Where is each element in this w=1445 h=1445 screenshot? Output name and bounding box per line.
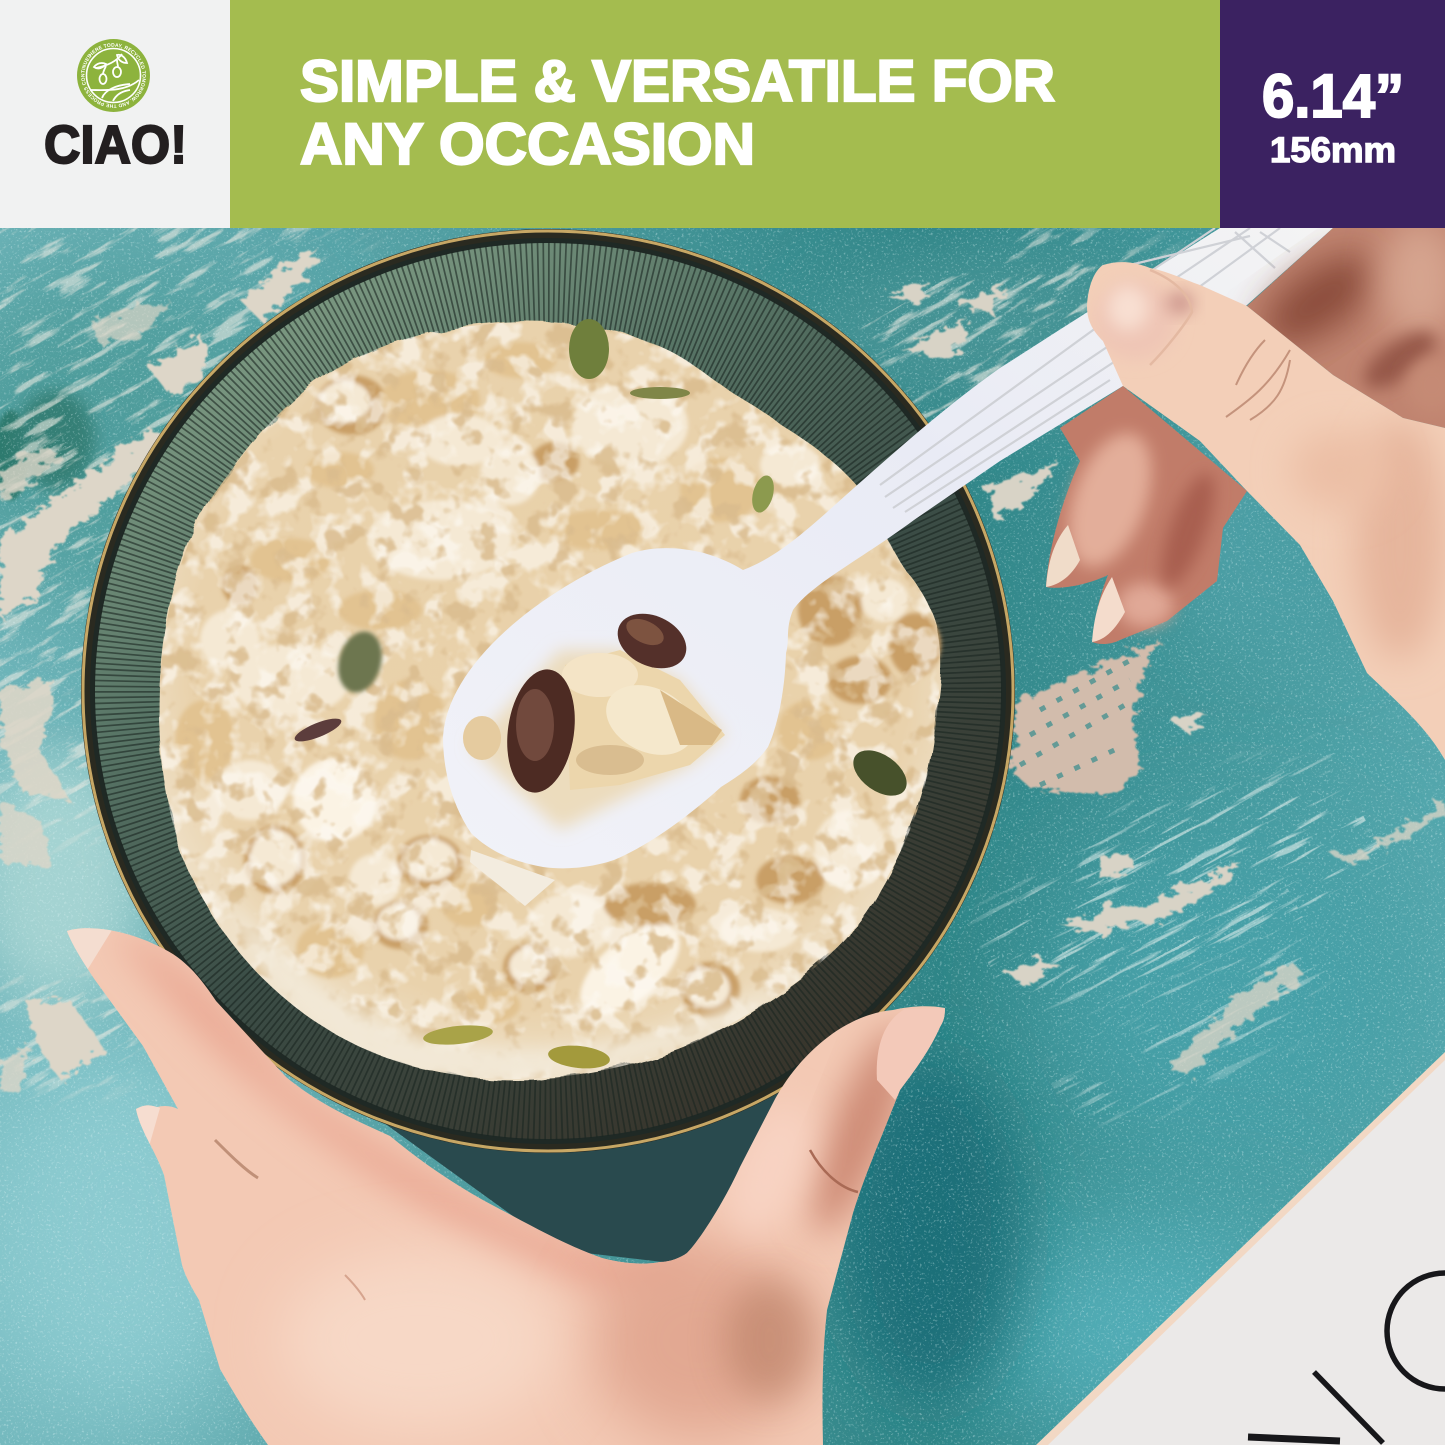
finger nails: [67, 928, 112, 969]
thumb nail: [877, 1008, 945, 1100]
left hand holding bowl: [60, 925, 950, 1445]
finger nails: [1046, 525, 1080, 587]
back fingers upper right: [1247, 228, 1445, 428]
knuckle creases: [1226, 340, 1290, 420]
icon: olive branch seal: [77, 39, 150, 112]
panel: size badge: [1220, 0, 1445, 228]
seeds and raisins in oatmeal: [292, 319, 915, 1071]
size in millimetres: 156mm: [1270, 131, 1396, 170]
panel: headline: [230, 0, 1220, 228]
curled fingers: [1046, 386, 1247, 644]
size in inches: 6.14”: [1262, 62, 1404, 130]
headline text: ANY OCCASION: [300, 112, 755, 177]
distressed streak texture: [0, 228, 1184, 1104]
book corner: [1036, 1052, 1445, 1445]
book lettering: [1248, 1273, 1445, 1443]
handle ribs: [880, 228, 1290, 512]
panel: logo: [0, 0, 230, 228]
headline text: SIMPLE & VERSATILE FOR: [300, 49, 1055, 114]
right hand holding spoon: [1046, 220, 1445, 765]
logo wordmark: CIAO!: [44, 115, 187, 175]
oatmeal: [150, 319, 950, 1090]
thumb and palm: [1080, 255, 1445, 765]
thumb nail edge: [1150, 270, 1192, 365]
knuckle creases: [215, 1140, 258, 1178]
spoon contents: [463, 603, 725, 830]
oat mottling: [150, 320, 950, 1090]
shadow under bowl: [380, 1090, 790, 1264]
headline text: [300, 49, 1055, 177]
header bar: [0, 0, 1445, 268]
spoon: [443, 228, 1333, 868]
oat clusters: [175, 342, 941, 1032]
fine streaks lower right: [968, 736, 1388, 1128]
bowl: [81, 229, 1015, 1153]
